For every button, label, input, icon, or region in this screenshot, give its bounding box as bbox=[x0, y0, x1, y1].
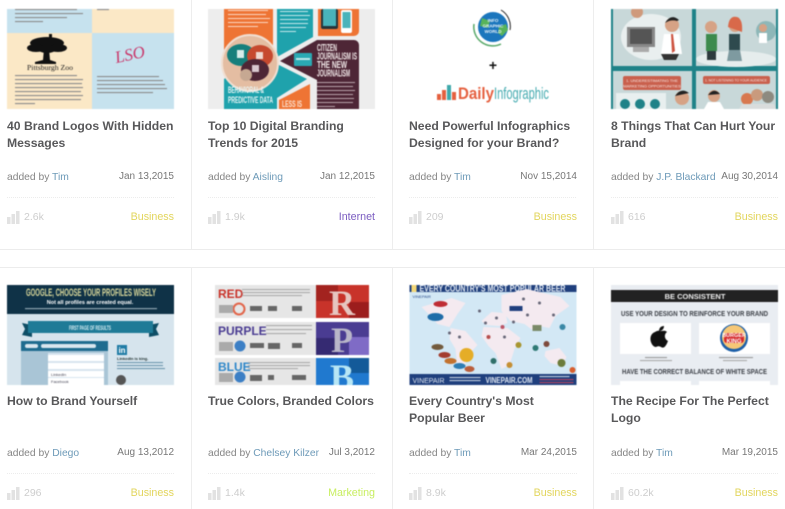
card: 40 Brand Logos bbox=[6, 8, 174, 224]
date: Nov 15,2014 bbox=[520, 171, 577, 182]
thumbnail: colour brands bbox=[215, 284, 370, 386]
view count: 60.2k bbox=[628, 487, 654, 499]
category: Business bbox=[735, 211, 778, 223]
thumbnail: logos bbox=[436, 9, 550, 104]
author: added by Tim bbox=[409, 448, 471, 459]
icon: bars bbox=[208, 487, 220, 500]
thumbnail: Google profiles: in bbox=[118, 346, 126, 355]
thumbnail: Google profiles: Facebook bbox=[51, 379, 69, 384]
card: Perfect Logo bbox=[610, 285, 779, 500]
date: Jul 3,2012 bbox=[329, 447, 375, 458]
icon: bars bbox=[611, 487, 624, 500]
thumbnail: digital branding: THE NEW bbox=[317, 60, 347, 71]
category: Business bbox=[131, 487, 174, 499]
thumbnail: logos: Infographic bbox=[494, 84, 549, 103]
thumbnail: be consistent: KING bbox=[726, 339, 742, 345]
thumbnail: logos: WORLD bbox=[484, 29, 502, 34]
thumbnail: be consistent bbox=[610, 285, 779, 385]
view count: 616 bbox=[628, 211, 646, 223]
view count: 296 bbox=[24, 487, 42, 499]
thumbnail: digital branding: BEHAVIORAL & bbox=[228, 85, 264, 95]
author: added by J.P. Blackard bbox=[611, 172, 716, 183]
author: added by Tim bbox=[611, 448, 673, 459]
author: added by Chelsey Kilzer bbox=[208, 448, 319, 459]
category: Business bbox=[534, 487, 577, 499]
thumbnail: Google profiles: LinkedIn bbox=[51, 372, 66, 377]
thumbnail: logos: GRAPHIC bbox=[483, 24, 504, 28]
thumbnail: Google profiles: Not all profiles are created equal. bbox=[47, 300, 134, 306]
title: Need Powerful Infographics Designed for your Brand? bbox=[409, 119, 570, 150]
thumbnail: colour brands: BLUE bbox=[218, 360, 251, 374]
thumbnail: colour brands: RED bbox=[218, 287, 244, 301]
author: added by Diego bbox=[7, 448, 79, 459]
category: Business bbox=[735, 487, 778, 499]
date: Mar 19,2015 bbox=[722, 447, 778, 458]
thumbnail: colour brands: P bbox=[331, 320, 353, 360]
thumbnail: illustrated people bbox=[610, 8, 779, 110]
category: Marketing bbox=[328, 487, 375, 499]
title: 8 Things That Can Hurt Your Brand bbox=[611, 119, 775, 150]
author: added by Aisling bbox=[208, 172, 283, 183]
thumbnail: logos: Daily bbox=[458, 84, 494, 103]
date: Jan 13,2015 bbox=[119, 171, 174, 182]
view count: 8.9k bbox=[426, 487, 446, 499]
title: How to Brand Yourself bbox=[7, 394, 137, 408]
thumbnail: digital branding: LESS IS bbox=[282, 99, 302, 109]
icon: bars bbox=[208, 211, 220, 224]
thumbnail: be consistent: BURGER bbox=[722, 333, 746, 339]
thumbnail: logos: INFO bbox=[488, 18, 499, 23]
thumbnail: Google profiles bbox=[6, 284, 175, 386]
card: Powerful Infographics bbox=[409, 9, 577, 224]
icon: bars bbox=[7, 211, 20, 224]
thumbnail: beer map: VINEPAIR bbox=[412, 376, 445, 385]
thumbnail: beer map: VINEPAIR.COM bbox=[486, 376, 533, 385]
title: 40 Brand Logos With Hidden Messages bbox=[7, 119, 173, 150]
card: Digital Branding Trends bbox=[208, 8, 375, 224]
thumbnail: illustrated people: 1. UNDERESTIMATING THE bbox=[626, 78, 678, 83]
view count: 209 bbox=[426, 211, 444, 223]
thumbnail: Google profiles: FIRST PAGE OF RESULTS bbox=[69, 326, 111, 332]
view count: 1.9k bbox=[225, 211, 245, 223]
title bbox=[409, 394, 534, 425]
thumbnail: hidden logos bbox=[6, 8, 174, 110]
title: True Colors, Branded Colors bbox=[208, 394, 374, 408]
icon: bars bbox=[611, 211, 624, 224]
card: True Colors bbox=[208, 284, 375, 500]
date: Mar 24,2015 bbox=[521, 447, 577, 458]
thumbnail: be consistent: BE CONSISTENT bbox=[665, 292, 726, 301]
thumbnail: beer map bbox=[408, 284, 578, 386]
thumbnail: hidden logos: LSO bbox=[112, 42, 147, 67]
icon: bars bbox=[409, 211, 422, 224]
title: Every Country's Most bbox=[409, 394, 534, 408]
title: Popular Beer bbox=[409, 411, 485, 425]
date: Aug 30,2014 bbox=[721, 171, 778, 182]
thumbnail: hidden logos: Pittsburgh Zoo bbox=[27, 64, 74, 72]
thumbnail: logos: + bbox=[489, 57, 497, 73]
card: How to Brand Yourself bbox=[6, 284, 175, 500]
card: 8 Things bbox=[610, 8, 779, 224]
view count: 2.6k bbox=[24, 211, 44, 223]
thumbnail: Google profiles: LinkedIn is king. bbox=[117, 356, 148, 361]
thumbnail: illustrated people: MARKETING OPPORTUNITIES bbox=[623, 84, 681, 88]
date: Jan 12,2015 bbox=[320, 171, 375, 182]
title: Top 10 Digital Branding Trends for 2015 bbox=[208, 119, 344, 150]
author: added by Tim bbox=[409, 172, 471, 183]
category: Business bbox=[534, 211, 577, 223]
category: Business bbox=[131, 211, 174, 223]
icon: bars bbox=[7, 487, 20, 500]
card: Popular Beer bbox=[408, 284, 578, 500]
thumbnail: colour brands: PURPLE bbox=[218, 324, 267, 338]
view count: 1.4k bbox=[225, 487, 245, 499]
thumbnail: digital branding: CITIZEN bbox=[317, 43, 337, 54]
thumbnail: beer map: VINEPAIR bbox=[412, 294, 431, 299]
title: The Recipe For The Perfect Logo bbox=[611, 394, 769, 425]
icon: bars bbox=[409, 487, 422, 500]
category: Internet bbox=[339, 211, 375, 223]
author: added by Tim bbox=[7, 172, 69, 183]
thumbnail: digital branding: PREDICTIVE DATA bbox=[228, 95, 273, 105]
date: Aug 13,2012 bbox=[117, 447, 174, 458]
thumbnail: digital branding bbox=[208, 8, 375, 110]
